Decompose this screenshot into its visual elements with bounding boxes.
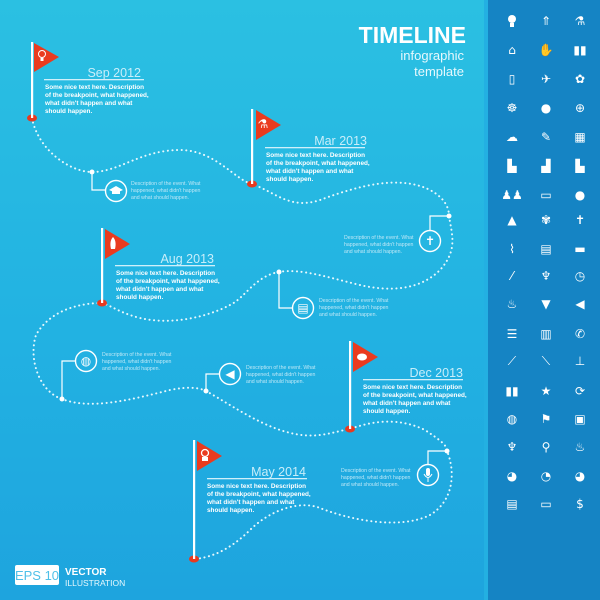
milestone: Dec 2013: what didn't happen and what [362,400,451,407]
event: signpost: ✝ [425,234,435,248]
event: signpost: happened, what didn't happen [344,242,413,248]
milestone: Mar 2013: ⚗ [258,117,268,131]
event: megaphone: and what should happen. [246,379,304,385]
milestone: May 2014: Some nice text here. Description [207,483,306,490]
icon grid: ◕ [575,469,586,483]
icon grid: ▭ [540,497,552,511]
icon grid: ▦ [574,130,586,144]
event: globe [60,350,172,402]
milestone: Sep 2012 [27,42,149,122]
milestone: Aug 2013: Some nice text here. Description [116,270,215,277]
event: megaphone: ◀ [225,367,235,381]
icon grid: ♟♟ [501,188,523,202]
EPS badge [15,565,125,588]
icon grid: ♨ [507,297,517,311]
event: graduation [90,170,201,202]
milestone: Sep 2012: Some nice text here. Description [45,84,144,91]
icon grid: ✆ [575,327,585,341]
icon grid: ⟋ [508,354,517,368]
event: globe: ◍ [81,354,92,368]
icon grid: ☁ [506,130,518,144]
milestone: Mar 2013: should happen. [266,176,313,183]
milestone: Sep 2012: what didn't happen and what [44,100,133,107]
icon grid: ▤ [506,497,518,511]
icon grid: $ [576,497,584,511]
event: microphone: happened, what didn't happen [341,475,410,481]
milestone: Dec 2013: should happen. [363,408,410,415]
icon grid: ♨ [575,440,585,454]
icon grid: ☸ [507,101,517,115]
title: template [414,64,464,79]
icon grid: ▣ [574,412,586,426]
event: megaphone: happened, what didn't happen [246,372,315,378]
EPS badge: EPS 10 [15,568,59,583]
icon grid: ▮▮ [573,43,587,57]
milestone: May 2014: what didn't happen and what [206,499,295,506]
milestone: Mar 2013: Mar 2013 [314,134,367,148]
icon grid: ⚑ [541,412,551,426]
icon grid: ⚲ [542,440,550,454]
milestone: Mar 2013: what didn't happen and what [265,168,354,175]
icon grid: ◀ [575,297,585,311]
event: signpost: and what should happen. [344,249,402,255]
milestone: Sep 2012: of the breakpoint, what happened, [45,92,149,99]
milestone: Mar 2013 [247,109,370,188]
icon grid: ☰ [507,327,517,341]
event: clipboard: and what should happen. [319,312,377,318]
milestone: Mar 2013: Some nice text here. Description [266,152,365,159]
milestone: May 2014: of the breakpoint, what happened, [207,491,311,498]
milestone: Aug 2013: Aug 2013 [160,252,214,266]
milestone: May 2014: should happen. [207,507,254,514]
event: megaphone: Description of the event. What [246,365,316,371]
icon grid: ● [575,188,585,202]
event: globe: and what should happen. [102,366,160,372]
icon grid: ▥ [540,327,552,341]
milestone: Mar 2013: of the breakpoint, what happened, [266,160,370,167]
title: infographic [400,48,464,63]
icon grid: ⚗ [575,14,585,28]
milestone: Dec 2013: of the breakpoint, what happened, [363,392,467,399]
icon grid: ⊥ [575,354,585,368]
icon grid: ✾ [541,213,551,227]
milestone: Dec 2013 [345,341,467,432]
icon grid: ▟ [540,158,551,173]
milestone: May 2014 [189,440,311,562]
icon grid: ▤ [540,242,552,256]
icon grid: ⁄ [508,269,516,283]
milestone: Sep 2012: should happen. [45,108,92,115]
icon grid: ▯ [509,72,515,86]
icon grid: ✋ [539,43,553,57]
milestone: May 2014: May 2014 [251,465,306,479]
sidebar [484,0,600,600]
icon grid: ▲ [507,213,517,227]
event: graduation: and what should happen. [131,195,189,201]
EPS badge: VECTOR [65,567,107,578]
EPS badge: ILLUSTRATION [65,578,125,588]
icon grid: ◍ [507,412,518,426]
event: microphone: and what should happen. [341,482,399,488]
icon grid: ⟍ [542,354,551,368]
icon grid: ⌇ [509,242,515,256]
event: clipboard: ▤ [297,301,309,315]
icon grid: ⊕ [575,101,585,115]
icon grid: ▼ [541,297,551,311]
event: globe: happened, what didn't happen [102,359,171,365]
event: globe: Description of the event. What [102,352,172,358]
milestone: Dec 2013: Some nice text here. Description [363,384,462,391]
icon grid: ▮▮ [505,384,519,398]
title: TIMELINE [359,22,466,48]
event: megaphone [204,364,316,394]
icon grid: ▙ [506,158,517,173]
milestone: Aug 2013: should happen. [116,294,163,301]
event: clipboard: happened, what didn't happen [319,305,388,311]
icon grid: ◷ [575,269,586,283]
event: signpost [344,214,452,255]
event: clipboard: Description of the event. What [319,298,389,304]
event: clipboard [276,270,389,318]
milestone: Sep 2012: Sep 2012 [87,66,141,80]
dotted timeline path [32,118,452,559]
icon grid: ✿ [575,72,585,86]
icon grid: ✈ [541,72,551,86]
title [359,22,466,79]
event: microphone [341,448,450,488]
milestone: Aug 2013: of the breakpoint, what happened, [116,278,220,285]
milestone: Dec 2013: Dec 2013 [409,366,463,380]
icon grid [501,14,587,511]
icon grid: ▬ [574,242,586,256]
milestone: Aug 2013: what didn't happen and what [115,286,204,293]
icon grid: ● [541,101,551,115]
icon grid: ✝ [575,213,585,227]
icon grid: ✎ [541,130,551,144]
milestone: Aug 2013 [97,228,220,306]
icon grid: ◕ [507,469,518,483]
event: microphone: Description of the event. What [341,468,411,474]
icon grid: ⇑ [541,14,551,28]
event: graduation: Description of the event. What [131,181,201,187]
icon grid: ⟳ [575,384,585,398]
icon grid: ▙ [574,158,585,173]
icon grid: ♆ [541,269,551,283]
icon grid: ◔ [541,469,551,483]
icon grid: ♆ [507,440,517,454]
icon grid: ★ [541,384,551,398]
event: graduation: happened, what didn't happen [131,188,200,194]
icon grid: ▭ [540,188,552,202]
icon grid: ⌂ [508,43,516,57]
event: signpost: Description of the event. What [344,235,414,241]
